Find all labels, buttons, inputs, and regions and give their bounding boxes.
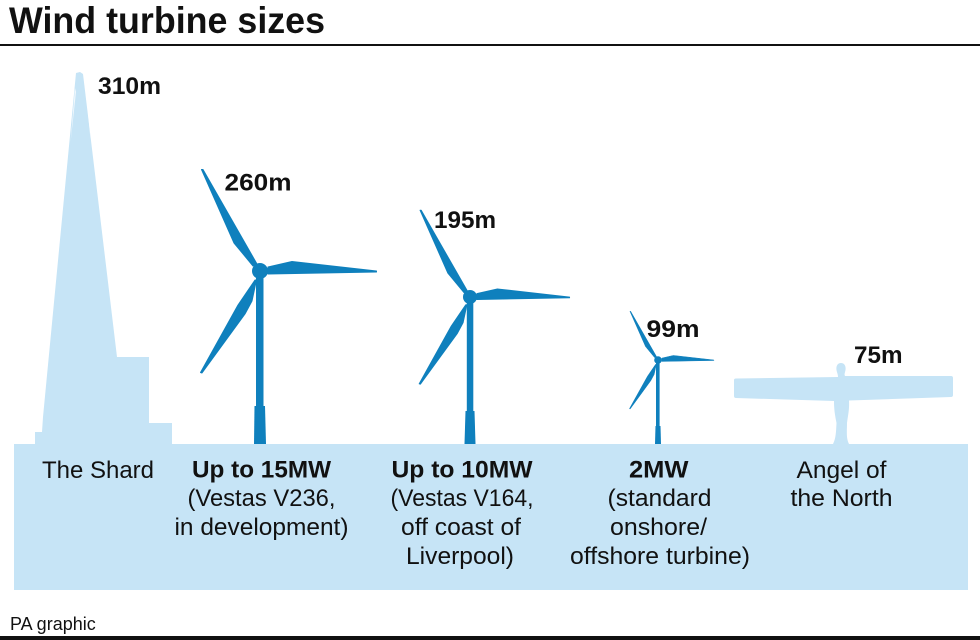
icon: The Shard silhouette [35,72,172,444]
caption: 10MW turbine [390,456,534,570]
icon: Angel of the North silhouette [734,363,953,444]
caption: 2MW turbine: (standard [608,485,712,512]
label: 99m: 99m [646,316,700,343]
caption: 10MW turbine: Up to 10MW [392,456,533,484]
caption: Angel of the North [790,457,892,512]
title: Wind turbine sizes [9,0,325,41]
caption: 15MW turbine: (Vestas V236, [188,485,336,512]
caption: Angel of the North: the North [790,485,892,512]
title rule [0,44,980,46]
ground panel [14,444,968,590]
label: 260m: 260m [224,170,292,196]
caption: 10MW turbine: Liverpool) [406,543,514,570]
caption: 15MW turbine: in development) [174,514,348,541]
bottom rule [0,636,980,640]
icon: 10MW turbine [419,210,570,444]
caption: 2MW turbine [570,456,750,570]
icon: 2MW turbine [629,311,714,444]
icon: 15MW turbine [200,170,376,444]
caption: 2MW turbine: offshore turbine) [570,543,750,570]
caption: Angel of the North: Angel of [796,457,887,484]
caption: 10MW turbine: (Vestas V164, [390,485,534,512]
caption: 10MW turbine: off coast of [401,514,521,541]
caption: 15MW turbine: Up to 15MW [192,456,331,484]
label: 75m: 75m [854,342,902,369]
label: 310m: 310m [98,73,161,100]
caption: 2MW turbine: onshore/ [610,514,707,541]
caption: 2MW turbine: 2MW [629,456,689,484]
caption: 15MW turbine [174,456,348,541]
source credit: PA graphic [10,614,96,634]
label: 195m: 195m [434,207,496,234]
caption: The Shard: The Shard [42,457,154,484]
